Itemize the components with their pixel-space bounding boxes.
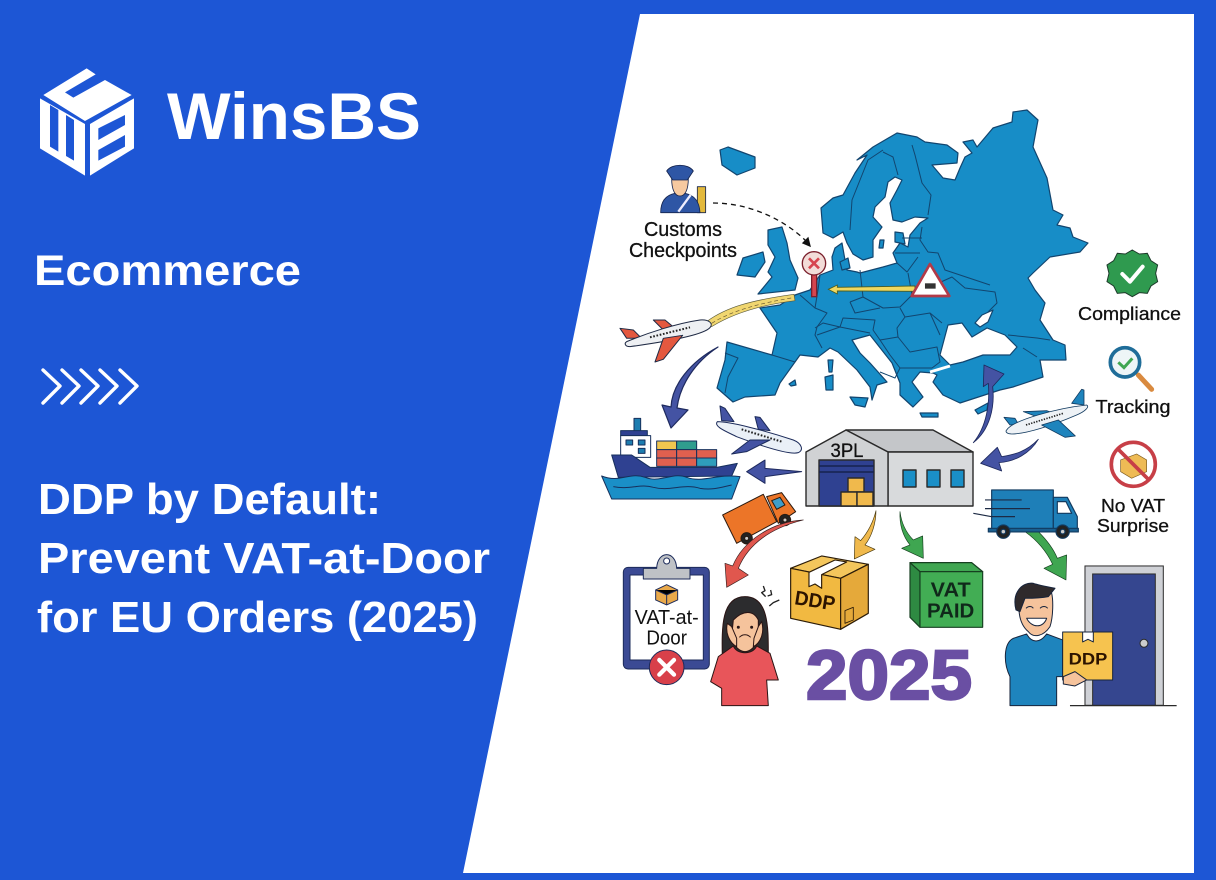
Sea of Azov	[975, 310, 993, 327]
icon: clipboard VAT-at-Door: Door	[646, 628, 687, 650]
panel: white illustration area	[463, 14, 1194, 873]
icon: tracking magnifier	[1110, 348, 1152, 389]
icon: DDP parcel: DDP	[793, 587, 837, 615]
icon: orange truck	[723, 493, 796, 544]
label: customs checkpoints	[629, 219, 737, 262]
arrow: warehouse to DDP box	[854, 511, 876, 559]
Bosporus strait	[930, 366, 950, 372]
arrow: warehouse up to map	[973, 365, 1004, 443]
title: Prevent VAT-at-Door	[38, 534, 490, 583]
icon: warning triangle	[912, 264, 949, 296]
route arrow to checkpoint	[828, 285, 915, 294]
arrow: warehouse to ship	[747, 460, 802, 483]
label: tracking: Tracking	[1096, 397, 1170, 417]
label: no VAT surprise	[1097, 496, 1169, 536]
dashed arrow to checkpoint	[713, 203, 810, 246]
label: compliance: Compliance	[1078, 304, 1181, 324]
arrow: warehouse to door	[1025, 532, 1067, 580]
icon: no VAT surprise	[1111, 442, 1155, 486]
icon: customs officer	[661, 165, 706, 213]
icon: plane, right	[1004, 389, 1088, 437]
logo wordmark: WinsBS	[167, 79, 421, 153]
icon: clipboard VAT-at-Door	[623, 555, 709, 685]
icon: blue delivery truck	[973, 490, 1078, 538]
internal borders	[725, 145, 1050, 393]
icon: clipboard VAT-at-Door: VAT-at-	[635, 607, 699, 629]
icon: happy customer with parcel	[1005, 583, 1113, 706]
arrow: truck to VAT-at-Door	[725, 520, 803, 587]
islands	[720, 147, 988, 417]
icon: door	[1070, 566, 1177, 706]
flight route: yellow road	[707, 294, 795, 327]
arrow: plane to warehouse	[981, 439, 1038, 471]
icon: VAT paid box	[910, 563, 983, 627]
icon: compliance badge	[1107, 250, 1158, 297]
icon: plane, centre	[717, 406, 801, 454]
map of Europe	[717, 110, 1088, 417]
title	[37, 475, 490, 642]
label: no VAT surprise: Surprise	[1097, 516, 1169, 536]
Black Sea	[940, 323, 1017, 365]
icon: happy customer with parcel: DDP	[1069, 649, 1107, 668]
title: for EU Orders (2025)	[37, 593, 478, 642]
arrow: plane to ship	[662, 347, 718, 428]
warehouse label: 3PL	[830, 441, 864, 462]
logo: WinsBS cube	[40, 68, 134, 176]
icon: plane, upper left	[620, 320, 711, 362]
arrow: warehouse to VAT paid	[900, 512, 923, 558]
label: customs checkpoints: Checkpoints	[629, 240, 737, 262]
icon: stressed woman	[711, 586, 779, 706]
label: no VAT surprise: No VAT	[1101, 496, 1165, 516]
icon: VAT paid box: PAID	[927, 600, 974, 623]
icon: checkpoint sign	[802, 252, 826, 297]
label: customs checkpoints: Customs	[644, 219, 722, 241]
icon: DDP parcel	[791, 556, 868, 629]
category label: Ecommerce	[34, 247, 301, 295]
icon: VAT paid box: VAT	[931, 579, 971, 602]
icon: chevrons	[43, 370, 137, 403]
title: DDP by Default:	[38, 475, 381, 524]
icon: container ship	[602, 418, 740, 499]
big year: 2025	[806, 636, 972, 714]
icon: 3PL warehouse	[806, 430, 973, 506]
